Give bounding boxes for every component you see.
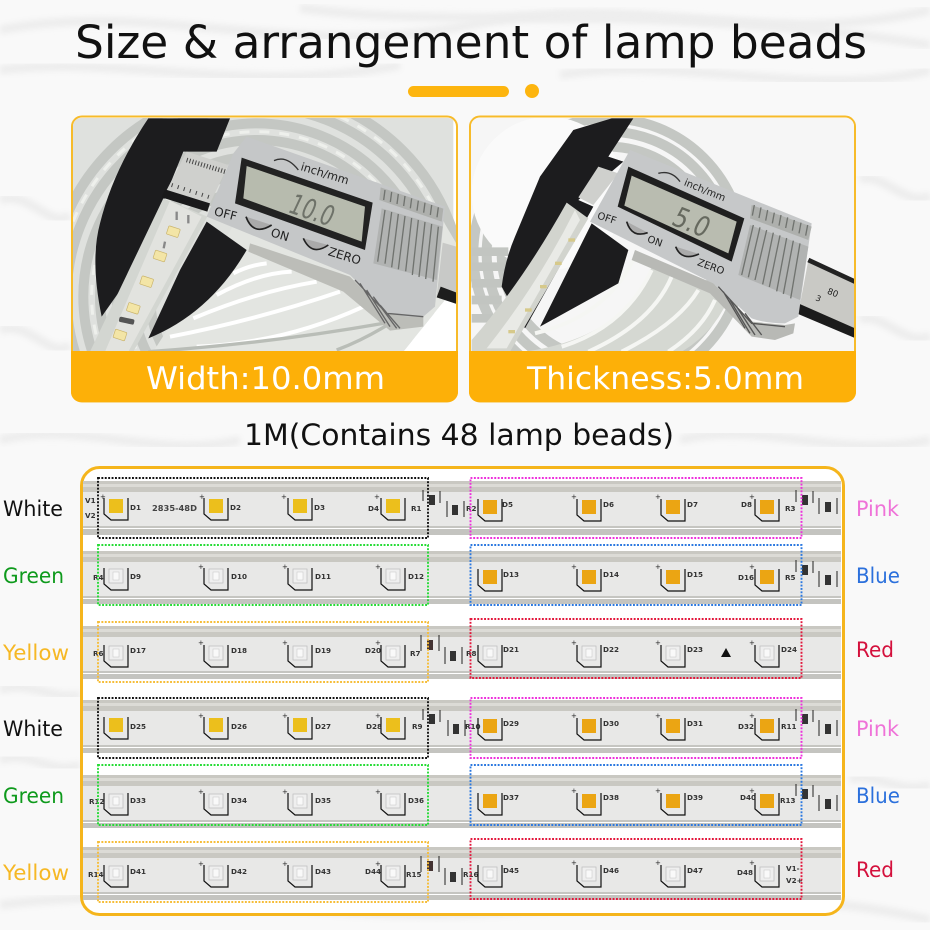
colour labels: left: White <box>3 717 63 741</box>
colour labels: left <box>2 497 69 885</box>
caption bar: thickness: Thickness:5.0mm <box>526 361 804 397</box>
strip row 1: R2 <box>466 504 477 513</box>
strip row 2: D15 <box>687 570 703 579</box>
strip row 1: + <box>281 493 287 501</box>
strip row 5: R13 <box>780 796 796 805</box>
caliper labels: ON <box>646 234 664 250</box>
colour labels: left: Yellow <box>2 861 69 885</box>
strip row 1: R1 <box>411 504 422 513</box>
strip row 6: D45 <box>503 866 519 875</box>
photo: caliper measuring strip width <box>73 118 456 351</box>
strip row 4: + <box>198 712 204 720</box>
strip row 1: D1 <box>130 503 141 512</box>
strip row 1: V2 <box>85 511 96 520</box>
strip row 5: + <box>655 787 661 795</box>
strip row 3: + <box>749 639 755 647</box>
strip row 6: R14 <box>88 870 104 879</box>
strip row 4: + <box>282 712 288 720</box>
strip row 6 <box>83 847 841 900</box>
strip row 4: D27 <box>315 722 331 731</box>
strip row 5: + <box>198 788 204 796</box>
strip row 2: D9 <box>130 572 141 581</box>
strip row 4: R11 <box>781 722 797 731</box>
caliper labels <box>596 178 727 277</box>
strip row 5: + <box>282 788 288 796</box>
colour labels: left: White <box>3 497 63 521</box>
strip row 4: D26 <box>231 722 247 731</box>
strip row 6: D43 <box>315 867 331 876</box>
strip row 3: R8 <box>466 649 477 658</box>
strip row 6: R15 <box>406 870 422 879</box>
strip row 1: V1 <box>85 496 96 505</box>
strip row 2: + <box>655 563 661 571</box>
strip row 2: D12 <box>408 572 424 581</box>
strip row 4: D30 <box>603 719 619 728</box>
caliper labels: ZERO <box>326 244 363 268</box>
strip row 2: D11 <box>315 572 331 581</box>
strip row 2 <box>83 551 841 604</box>
strip row 5: + <box>749 787 755 795</box>
strip row 4: R9 <box>412 722 423 731</box>
strip row 5: D37 <box>503 793 519 802</box>
strip row 6: + <box>282 860 288 868</box>
strip row 3: D21 <box>503 645 519 654</box>
strip row 2: R4 <box>93 573 104 582</box>
photo: caliper measuring strip thickness <box>471 118 854 351</box>
strip row 5: D39 <box>687 793 703 802</box>
panel: lamp bead arrangement <box>82 468 844 914</box>
title: Size & arrangement of lamp beads <box>75 16 867 69</box>
strip row 4: + <box>375 712 381 720</box>
strip row 6: + <box>198 860 204 868</box>
strip row 1: D3 <box>314 503 325 512</box>
strip row 6: D46 <box>603 866 619 875</box>
caption bar: thickness <box>469 351 856 402</box>
strip row 1: D7 <box>687 500 698 509</box>
panel: width measurement <box>71 116 458 402</box>
strip row 3: D17 <box>130 646 146 655</box>
colour labels: right: Blue <box>856 564 900 588</box>
strip row 3: D23 <box>687 645 703 654</box>
strip side view <box>472 203 588 352</box>
strip row 1: + <box>100 493 106 501</box>
strip row 2: R5 <box>785 573 796 582</box>
caliper labels: inch/mm <box>682 178 727 204</box>
strip row 2: D13 <box>503 570 519 579</box>
strip row 3: + <box>375 639 381 647</box>
strip row 3: D24 <box>781 645 797 654</box>
strip row 3: + <box>198 639 204 647</box>
strip row 5: D40 <box>740 793 756 802</box>
colour labels: left: Green <box>3 564 64 588</box>
subtitle: 1M(Contains 48 lamp beads) <box>244 418 674 452</box>
strip row 6: D44 <box>365 867 381 876</box>
strip row 1: 2835-48D <box>152 503 197 513</box>
strip row 6: D47 <box>687 866 703 875</box>
dotted group boxes: right column <box>470 478 802 899</box>
strip row 5: D38 <box>603 793 619 802</box>
caliper reading: 5.0 <box>667 201 716 244</box>
strip row 3: D19 <box>315 646 331 655</box>
strip row 2: + <box>749 563 755 571</box>
strip row 6: V1- <box>786 864 800 873</box>
strip row 1: + <box>749 493 755 501</box>
strip row 4: + <box>749 712 755 720</box>
strip row 4 <box>83 700 841 753</box>
photo: caliper measuring strip thickness: 80 <box>826 287 839 300</box>
strip row 1: + <box>655 493 661 501</box>
strip row 3 <box>83 626 841 679</box>
strip row 5 <box>83 775 841 828</box>
caption bar: width: Width:10.0mm <box>146 361 385 397</box>
caliper labels <box>213 159 363 268</box>
strip row 1: D2 <box>230 503 241 512</box>
strip row 6: D41 <box>130 867 146 876</box>
strip row 6: + <box>749 859 755 867</box>
icon: black triangle marker <box>721 648 731 657</box>
strip row 6: + <box>655 859 661 867</box>
strip row 4: + <box>571 712 577 720</box>
strip row 2: D14 <box>603 570 619 579</box>
strip row 4: D28 <box>366 722 382 731</box>
caliper labels: OFF <box>213 204 239 224</box>
strip row 1: D4 <box>368 504 379 513</box>
strip row 3: R6 <box>93 649 104 658</box>
strip row 5: D34 <box>231 796 247 805</box>
strip row 2: + <box>571 563 577 571</box>
colour labels: left: Green <box>3 784 64 808</box>
photo: caliper measuring strip thickness: 3 <box>814 294 822 304</box>
strip row 5: + <box>375 788 381 796</box>
colour labels: right: Blue <box>856 784 900 808</box>
strip row 6: + <box>571 859 577 867</box>
strip row 2: D16 <box>738 573 754 582</box>
strip row 6: R16 <box>463 870 479 879</box>
strip row 6: D48 <box>737 868 753 877</box>
colour labels: right <box>856 497 900 882</box>
strip row 5: + <box>571 787 577 795</box>
caliper labels: ON <box>269 225 291 244</box>
strip row 2: + <box>375 563 381 571</box>
strip with LEDs <box>90 198 207 352</box>
strip row 2: + <box>198 563 204 571</box>
caption bar: width <box>71 351 458 402</box>
strip row 3: + <box>655 639 661 647</box>
strip row 4: D32 <box>738 722 754 731</box>
strip row 5: R12 <box>89 797 105 806</box>
panel: thickness measurement <box>465 110 856 402</box>
strip row 4: D31 <box>687 719 703 728</box>
strip row 3: + <box>282 639 288 647</box>
strip row 6: V2+ <box>786 876 803 885</box>
strip row 1 <box>83 481 841 535</box>
strip row 1: + <box>571 493 577 501</box>
strip row 3: D18 <box>231 646 247 655</box>
strip row 4: D25 <box>130 722 146 731</box>
caliper labels: ZERO <box>696 257 726 277</box>
strip row 1: + <box>199 493 205 501</box>
strip row 5: D35 <box>315 796 331 805</box>
strip row 2: D10 <box>231 572 247 581</box>
title accent: bar and dot <box>408 84 539 98</box>
strip row 4: D29 <box>503 719 519 728</box>
caliper labels: inch/mm <box>299 159 351 187</box>
colour labels: right: Pink <box>856 497 900 521</box>
colour labels: left: Yellow <box>2 641 69 665</box>
strip row 5: D33 <box>130 796 146 805</box>
strip row 4: + <box>655 712 661 720</box>
strip row 1: R3 <box>785 504 796 513</box>
strip row 1: D8 <box>741 500 752 509</box>
strip row 3: D20 <box>365 646 381 655</box>
strip row 1: + <box>374 493 380 501</box>
dotted group boxes: left column <box>98 478 428 902</box>
strip row 5: D36 <box>408 796 424 805</box>
colour labels: right: Pink <box>856 717 900 741</box>
strip row 6: + <box>375 860 381 868</box>
strip row 1: D5 <box>502 500 513 509</box>
caliper reading: 10.0 <box>284 188 340 233</box>
colour labels: right: Red <box>856 858 894 882</box>
strip row 1: D6 <box>603 500 614 509</box>
strip row 2: + <box>282 563 288 571</box>
strip row 4: R10 <box>465 722 481 731</box>
strip row 3: D22 <box>603 645 619 654</box>
strip row 6: D42 <box>231 867 247 876</box>
colour labels: right: Red <box>856 638 894 662</box>
strip row 3: + <box>571 639 577 647</box>
strip row 3: R7 <box>410 649 421 658</box>
caliper labels: OFF <box>596 211 618 227</box>
